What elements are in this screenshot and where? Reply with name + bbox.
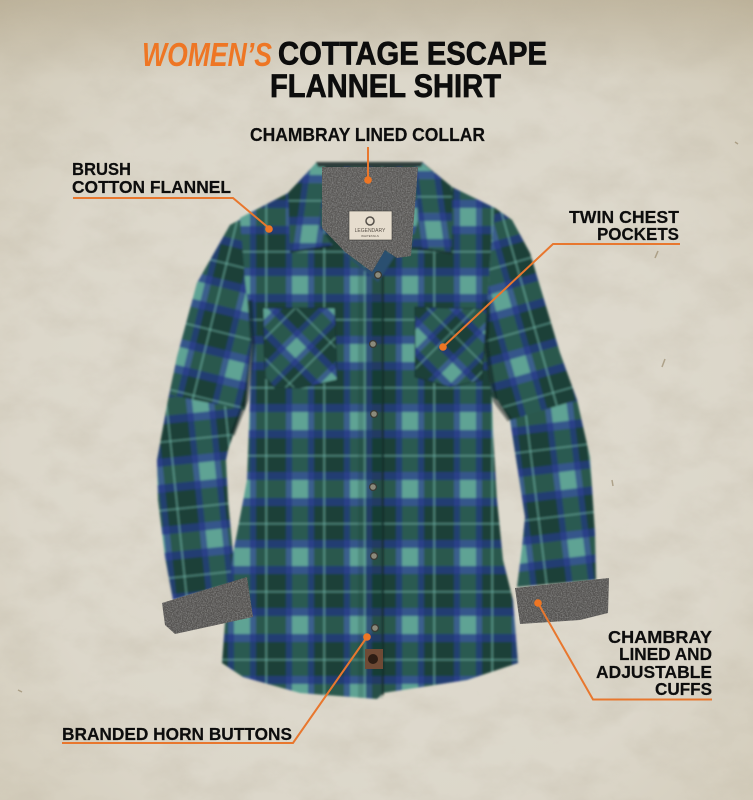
brand neck label: WHITETAILS: [361, 234, 379, 238]
callout: brush cotton flannel: COTTON FLANNEL: [72, 177, 231, 197]
callout: twin chest pockets: [439, 207, 680, 351]
title: [142, 36, 547, 104]
callout: chambray lined collar: [250, 125, 485, 184]
neck front opening: [340, 248, 395, 282]
callout: branded horn buttons: [62, 633, 371, 744]
right cuff: [515, 578, 609, 624]
shirt body right panel: [383, 162, 518, 693]
sleeve shadow seams: [232, 300, 510, 435]
title word: WOMEN'S: WOMEN’S: [142, 36, 272, 73]
right sleeve: [485, 208, 596, 587]
callout: twin chest pockets: POCKETS: [597, 224, 679, 244]
button placket: [358, 255, 384, 698]
collar top band: [316, 162, 423, 167]
right collar: [411, 163, 452, 252]
buttons: [370, 272, 381, 631]
left collar: [288, 163, 333, 252]
left sleeve: [157, 218, 252, 600]
callout: chambray lined and adjustable cuffs: CHAMBRAY: [608, 627, 712, 647]
shirt plaid fabric: [157, 162, 596, 699]
left cuff: [162, 577, 253, 634]
brand neck label: [349, 211, 392, 240]
shirt body left panel: [222, 162, 383, 699]
callout: chambray lined collar: CHAMBRAY LINED COLLAR: [250, 125, 485, 145]
callout: chambray lined and adjustable cuffs: CUFFS: [655, 679, 712, 699]
right chest pocket: [415, 307, 487, 387]
callout: chambray lined and adjustable cuffs: LINED AND: [619, 644, 712, 664]
flannel shirt: [157, 162, 609, 699]
collar shadow: [290, 246, 452, 253]
callout: brush cotton flannel: [72, 159, 273, 233]
title line 1: COTTAGE ESCAPE: [278, 36, 547, 72]
callout: chambray lined and adjustable cuffs: ADJUSTABLE: [596, 662, 712, 682]
collar lining: [322, 167, 418, 272]
callout: chambray lined and adjustable cuffs: [534, 599, 712, 700]
callout: twin chest pockets: TWIN CHEST: [569, 207, 679, 227]
brand neck label: LEGENDARY: [355, 228, 386, 234]
branded leather patch: [365, 649, 383, 669]
callout: branded horn buttons: BRANDED HORN BUTTONS: [62, 724, 292, 744]
title line 2: FLANNEL SHIRT: [270, 68, 501, 104]
left chest pocket: [263, 308, 337, 388]
callout: brush cotton flannel: BRUSH: [72, 159, 131, 179]
